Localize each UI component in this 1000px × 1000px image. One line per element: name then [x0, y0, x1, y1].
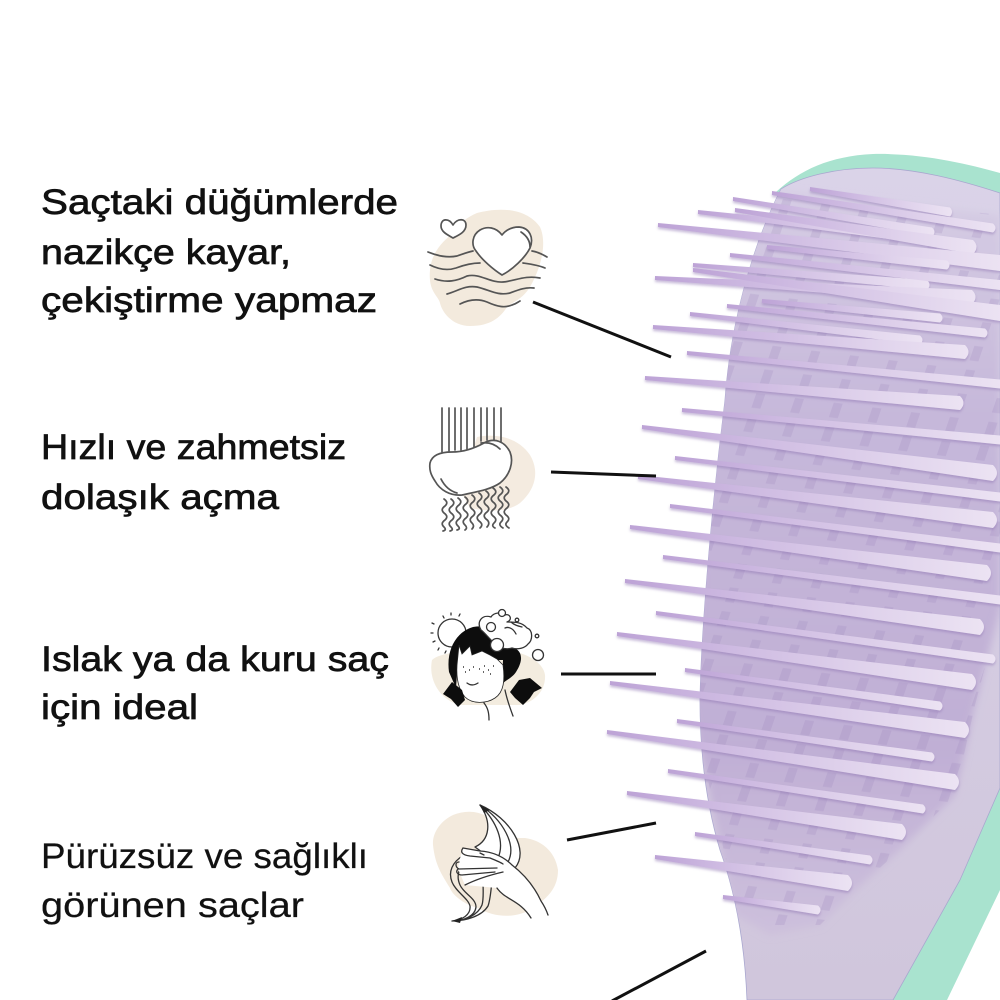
connector line 3	[561, 672, 656, 676]
hairbrush	[607, 154, 1000, 1000]
connector line 1	[533, 302, 671, 357]
text block: gentle on knots: Saçtaki düğümlerde	[41, 183, 398, 222]
icon: hearts and waves	[428, 210, 547, 326]
bristle bed	[690, 190, 1000, 935]
text block: gentle on knots	[41, 183, 398, 320]
text block: gentle on knots: çekiştirme yapmaz	[41, 281, 377, 320]
icon: girl washing hair	[431, 610, 545, 720]
icon: hand holding hair	[433, 805, 558, 923]
text block: wet or dry hair	[41, 640, 389, 727]
text block: wet or dry hair: için ideal	[41, 688, 198, 727]
connector line 4	[567, 823, 656, 840]
connector line 2	[551, 472, 656, 476]
text block: gentle on knots: nazikçe kayar,	[41, 233, 291, 272]
text block: smooth healthy hair: görünen saçlar	[41, 886, 304, 925]
text block: wet or dry hair: Islak ya da kuru saç	[41, 640, 389, 679]
text block: fast detangling: dolaşık açma	[41, 478, 280, 517]
connector line 5	[612, 951, 706, 1000]
icon: hair strand through brush	[430, 408, 535, 531]
text block: fast detangling: Hızlı ve zahmetsiz	[41, 428, 346, 467]
brush green shell	[776, 154, 1000, 1000]
text block: smooth healthy hair: Pürüzsüz ve sağlıklı	[41, 837, 368, 876]
text block: smooth healthy hair	[41, 837, 368, 925]
brush lavender body	[700, 168, 1000, 1000]
bristles	[607, 187, 1000, 914]
text block: fast detangling	[41, 428, 346, 517]
